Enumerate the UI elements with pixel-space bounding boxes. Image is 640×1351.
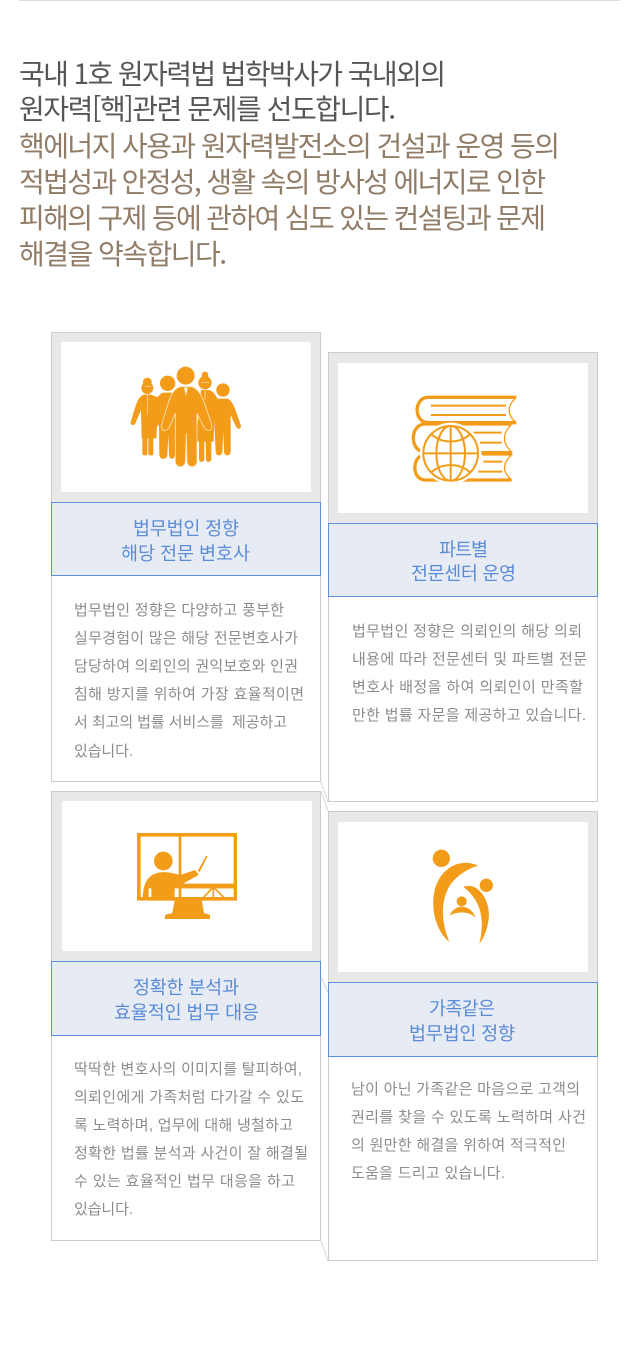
card 3 text: 딱딱한 변호사의 이미지를 탈피하여, (74, 1061, 302, 1078)
card 4 title: 법무법인 정향 (409, 1023, 515, 1044)
card 1 text: 있습니다. (74, 743, 133, 760)
card 3 title: 정확한 분석과 (133, 977, 239, 998)
card 2 text (352, 623, 587, 724)
card 4 text (351, 1081, 586, 1182)
card 3 text: 의뢰인에게 가족처럼 다가갈 수 있도 (74, 1089, 304, 1106)
card 1 text: 침해 방지를 위하여 가장 효율적이면 (74, 686, 304, 703)
card 1 text: 서 최고의 법률 서비스를 제공하고 (74, 714, 287, 731)
card 3 title (114, 977, 259, 1023)
panel: card 3 (52, 792, 320, 1240)
intro text: 적법성과 안정성, 생활 속의 방사성 에너지로 인한 (19, 161, 546, 201)
card 2 text: 법무법인 정향은 의뢰인의 해당 의뢰 (352, 623, 582, 640)
card 2 text: 만한 법률 자문을 제공하고 있습니다. (352, 707, 586, 724)
heading (19, 53, 446, 128)
card 2 title (411, 539, 516, 584)
card 4 text: 남이 아닌 가족같은 마음으로 고객의 (351, 1081, 580, 1098)
intro text: 핵에너지 사용과 원자력발전소의 건설과 운영 등의 (19, 125, 560, 165)
card 3 text: 있습니다. (74, 1201, 133, 1218)
icon: family (433, 850, 493, 944)
intro text (19, 125, 560, 273)
card 1 title: 법무법인 정향 (133, 518, 239, 539)
card 4 title (409, 998, 515, 1044)
card 1 text: 실무경험이 많은 해당 전문변호사가 (74, 630, 298, 647)
card 4 title: 가족같은 (429, 998, 495, 1019)
card 2 text: 변호사 배정을 하여 의뢰인이 만족할 (352, 679, 583, 696)
card 3 text: 수 있는 효율적인 법무 대응을 하고 (74, 1173, 295, 1190)
card 4 text: 의 원만한 해결을 위하여 적극적인 (351, 1137, 566, 1154)
card 2 title: 파트별 (439, 539, 488, 560)
panel: card 2 (328, 352, 598, 802)
panel: card 1 (52, 332, 320, 782)
card 1 title: 해당 전문 변호사 (121, 543, 250, 564)
icon: books and globe (413, 397, 516, 484)
intro text: 피해의 구제 등에 관하여 심도 있는 컨설팅과 문제 (19, 197, 546, 237)
card 3 title: 효율적인 법무 대응 (114, 1002, 259, 1023)
intro text: 해결을 약속합니다. (19, 233, 227, 273)
card 1 text: 법무법인 정향은 다양하고 풍부한 (74, 602, 284, 619)
card 3 text: 정확한 법률 분석과 사건이 잘 해결될 (74, 1145, 308, 1162)
icon: group of people (131, 367, 241, 467)
card 2 text: 내용에 따라 전문센터 및 파트별 전문 (352, 651, 587, 668)
card 4 text: 권리를 찾을 수 있도록 노력하며 사건 (351, 1109, 586, 1126)
card 1 text (74, 602, 304, 760)
panel: card 4 (328, 812, 598, 1260)
heading: 원자력[핵]관련 문제를 선도합니다. (19, 88, 396, 128)
card 3 text (74, 1061, 308, 1218)
card 2 title: 전문센터 운영 (411, 563, 516, 584)
card 4 text: 도움을 드리고 있습니다. (351, 1165, 505, 1182)
heading: 국내 1호 원자력법 법학박사가 국내외의 (19, 53, 446, 93)
card 1 title (121, 518, 250, 564)
icon: presenter at a board (137, 833, 237, 919)
card 3 text: 록 노력하며, 업무에 대해 냉철하고 (74, 1117, 293, 1134)
card 1 text: 담당하여 의뢰인의 권익보호와 인권 (74, 658, 298, 675)
